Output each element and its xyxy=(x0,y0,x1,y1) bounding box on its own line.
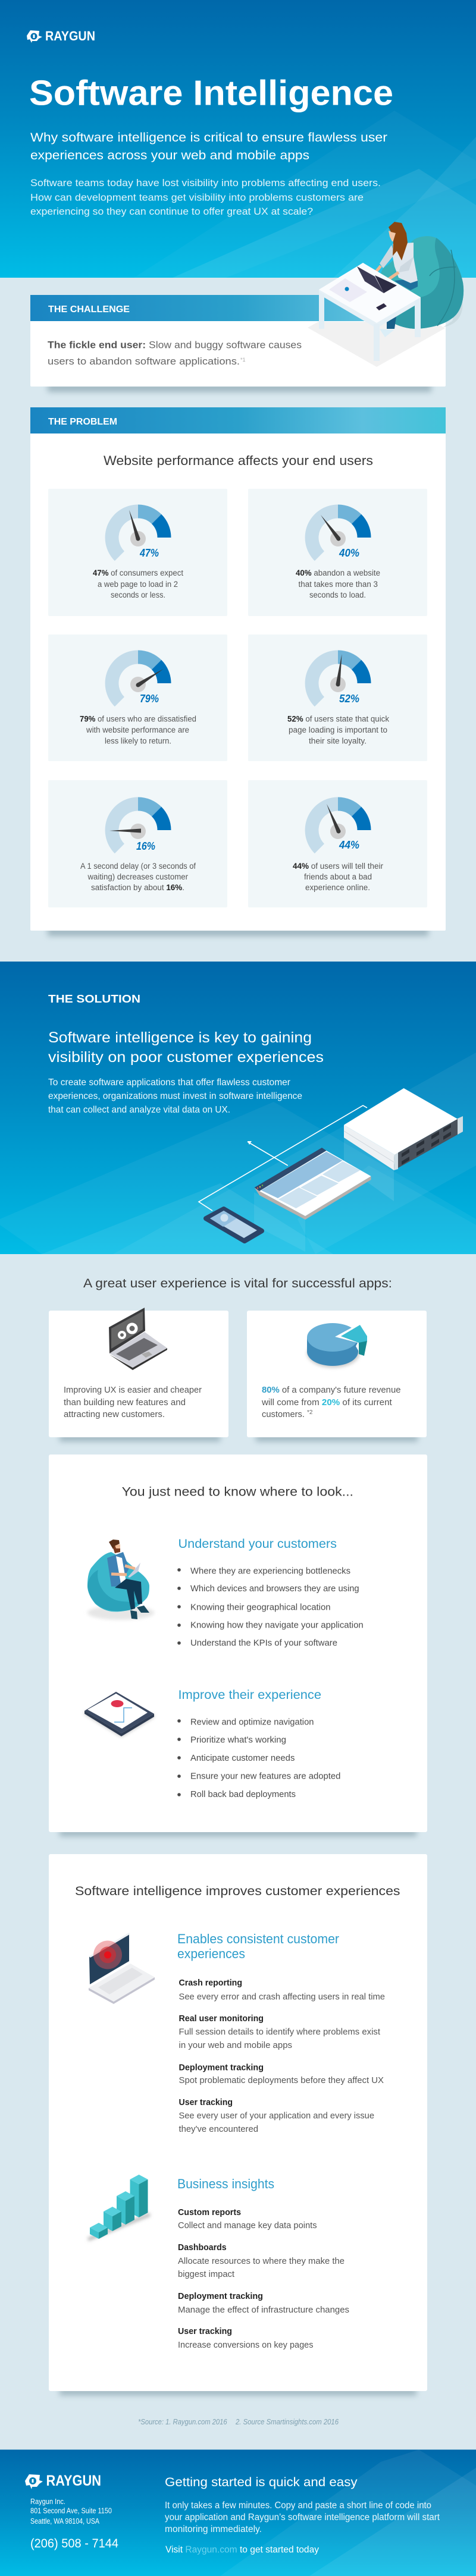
card: 16% xyxy=(48,780,227,907)
card: 52% xyxy=(248,634,427,761)
heading: You just need to know where to look... xyxy=(122,1484,353,1499)
card: 44%: 44% xyxy=(339,839,359,851)
list: understand: Knowing their geographical location xyxy=(190,1602,331,1613)
panel: improves customer experiences xyxy=(49,1854,427,2395)
card: improving UX xyxy=(49,1308,228,1441)
card: 79%: 79% xyxy=(140,693,159,705)
illustration: woman at desk on beanbag xyxy=(308,222,464,367)
challenge heading: THE CHALLENGE xyxy=(48,304,130,315)
card: 80/20 revenue: customers. xyxy=(262,1410,305,1419)
intro text: experiencing so they can continue to offer great UX at scale? xyxy=(30,206,313,217)
card: 52%: 52% of users state that quick xyxy=(287,715,389,723)
subtitle xyxy=(30,130,387,162)
feature list: enables: Crash reporting xyxy=(178,1978,242,1988)
intro text: How can development teams get visibility into problems customers are xyxy=(30,193,364,203)
challenge text xyxy=(48,339,302,367)
heading: great user experience: A great user experience is vital for successful apps: xyxy=(83,1276,392,1290)
card: 47%: seconds or less. xyxy=(111,590,165,599)
footer heading: Getting started is quick and easy xyxy=(165,2475,358,2489)
card: 47% xyxy=(48,489,227,616)
solution text xyxy=(48,1077,302,1115)
feature list: business insights: Deployment tracking xyxy=(178,2291,263,2301)
card: 47%: a web page to load in 2 xyxy=(98,580,178,589)
feature list: enables: they've encountered xyxy=(178,2124,258,2134)
heading: business insights: Business insights xyxy=(177,2176,274,2191)
icon: bar chart xyxy=(88,2175,150,2239)
heading: website performance: Website performance affects your end users xyxy=(104,453,373,468)
card: 40%: seconds to load. xyxy=(309,590,366,599)
icon: laptop with crash heatmap xyxy=(89,1933,155,2004)
call to action: Visit Raygun.com to get started today xyxy=(165,2545,319,2555)
list: understand: Knowing how they navigate your application xyxy=(190,1620,364,1631)
card: 79% xyxy=(48,634,227,761)
heading: understand your customers: Understand your customers xyxy=(178,1537,337,1551)
card: 16%: waiting) decreases customer xyxy=(87,872,188,881)
card: 40%: 40% xyxy=(339,547,359,559)
challenge text: The fickle end user: Slow and buggy software causes xyxy=(48,339,302,351)
phone number: (206) 508 - 7144 xyxy=(30,2537,118,2550)
connector lines xyxy=(199,1105,367,1211)
solution section background xyxy=(0,962,476,1254)
card: 44%: 44% of users will tell their xyxy=(293,862,383,871)
heading: enables consistent customer experiences: Enables consistent customer xyxy=(177,1931,339,1946)
feature list: business insights xyxy=(178,2207,349,2350)
address: Raygun Inc. xyxy=(30,2498,65,2506)
address xyxy=(30,2498,112,2525)
feature list: business insights: Collect and manage key data points xyxy=(178,2220,317,2231)
logo: Raygun header xyxy=(27,29,95,43)
address: 801 Second Ave, Suite 1150 xyxy=(30,2507,112,2515)
card: 47%: 47% of consumers expect xyxy=(93,568,183,577)
icon: tablet with heart xyxy=(84,1692,154,1737)
footer text: your application and Raygun’s software intelligence platform will start xyxy=(165,2512,440,2522)
footer text: monitoring immediately. xyxy=(165,2524,262,2534)
hero section xyxy=(0,0,476,278)
card: 44% xyxy=(248,780,427,907)
card: improving UX: attracting new customers. xyxy=(64,1410,165,1419)
subtitle: experiences across your web and mobile apps xyxy=(30,148,309,162)
feature list: enables: Full session details to identify where problems exist xyxy=(178,2027,381,2037)
card: 16%: A 1 second delay (or 3 seconds of xyxy=(80,862,196,871)
panel: the challenge xyxy=(30,295,446,392)
heading: enables consistent customer experiences: experiences xyxy=(177,1946,245,1961)
solution label: THE SOLUTION xyxy=(48,993,140,1005)
feature list: business insights: Manage the effect of infrastructure changes xyxy=(178,2305,349,2315)
card: 79%: less likely to return. xyxy=(105,736,171,746)
problem heading: THE PROBLEM xyxy=(48,417,117,427)
card: 40%: 40% abandon a website xyxy=(296,568,380,577)
list: understand: Which devices and browsers they are using xyxy=(190,1584,359,1594)
illustration: server, browser and phone xyxy=(199,1088,463,1252)
list: understand xyxy=(177,1566,364,1648)
feature list: business insights: Dashboards xyxy=(178,2242,227,2253)
feature list: enables: User tracking xyxy=(178,2097,233,2107)
feature list: business insights: User tracking xyxy=(178,2326,232,2336)
panel: where to look xyxy=(49,1455,427,1836)
challenge text: users to abandon software applications. xyxy=(48,356,240,367)
feature list: business insights: Allocate resources to where they make the xyxy=(178,2256,345,2266)
feature list: enables: Spot problematic deployments before they affect UX xyxy=(178,2075,384,2085)
card: 80/20 revenue: will come from 20% of its current xyxy=(261,1398,392,1408)
intro text: Software teams today have lost visibility into problems affecting end users. xyxy=(30,178,381,189)
feature list: business insights: Increase conversions on key pages xyxy=(178,2340,313,2350)
subtitle: Why software intelligence is critical to ensure flawless user xyxy=(30,130,387,144)
address: Seattle, WA 98104, USA xyxy=(30,2517,100,2525)
list: understand: Where they are experiencing bottlenecks xyxy=(190,1566,350,1576)
logo: Raygun footer: RAYGUN xyxy=(46,2473,101,2489)
sources xyxy=(138,2417,339,2426)
card: 52%: 52% xyxy=(339,693,359,705)
card: 80/20 revenue xyxy=(247,1311,427,1441)
card: 52%: their site loyalty. xyxy=(309,736,367,746)
solution heading: Software intelligence is key to gaining xyxy=(48,1029,312,1046)
heading: improve their experience: Improve their experience xyxy=(178,1688,321,1702)
solution heading: visibility on poor customer experiences xyxy=(48,1049,324,1066)
footer text: It only takes a few minutes. Copy and paste a short line of code into xyxy=(165,2500,431,2511)
intro text xyxy=(30,178,381,217)
logo: Raygun footer xyxy=(25,2473,101,2489)
feature list: enables: See every error and crash affecting users in real time xyxy=(178,1992,385,2002)
card: improving UX: than building new features and xyxy=(64,1398,186,1408)
feature list: business insights: biggest impact xyxy=(178,2269,235,2279)
card: 44%: experience online. xyxy=(305,883,370,892)
feature list: enables: Real user monitoring xyxy=(178,2013,264,2024)
sources: *Source: 1. Raygun.com 2016 xyxy=(138,2417,227,2426)
feature list: enables: See every user of your application and every issue xyxy=(178,2111,374,2121)
card: improving UX: Improving UX is easier and cheaper xyxy=(64,1386,202,1395)
card: 80/20 revenue: *2 xyxy=(307,1409,313,1416)
card: 16%: satisfaction by about 16%. xyxy=(91,883,184,892)
title: Software Intelligence xyxy=(29,74,393,113)
card: 47%: 47% xyxy=(139,547,159,559)
card: 52%: page loading is important to xyxy=(289,725,387,734)
icon: laptop with gears xyxy=(109,1308,167,1370)
heading: enables consistent customer experiences xyxy=(177,1931,339,1961)
solution text: that can collect and analyze vital data on UX. xyxy=(48,1105,230,1115)
feature list: enables: Deployment tracking xyxy=(178,2062,264,2073)
sources: 2. Source Smartinsights.com 2016 xyxy=(235,2417,339,2426)
list: improve: Prioritize what's working xyxy=(190,1735,286,1745)
solution text: experiences, organizations must invest in software intelligence xyxy=(48,1091,302,1101)
card: 40%: that takes more than 3 xyxy=(299,580,378,589)
list: understand: Understand the KPIs of your software xyxy=(190,1638,337,1648)
panel: the problem xyxy=(30,407,446,936)
footer background xyxy=(0,2450,476,2576)
feature list: enables: in your web and mobile apps xyxy=(178,2040,292,2050)
illustration: man on beanbag xyxy=(87,1540,154,1620)
list: improve: Roll back bad deployments xyxy=(190,1789,296,1799)
list: improve: Review and optimize navigation xyxy=(190,1717,314,1727)
list: improve: Anticipate customer needs xyxy=(190,1753,295,1763)
solution heading xyxy=(48,1029,324,1066)
card: 80/20 revenue: 80% of a company's future revenue xyxy=(262,1386,401,1395)
logo: Raygun header: RAYGUN xyxy=(45,29,95,43)
feature list: business insights: Custom reports xyxy=(178,2207,241,2217)
footer text xyxy=(165,2500,440,2534)
icon: pie chart xyxy=(307,1323,367,1368)
heading: Software intelligence improves customer experiences xyxy=(75,1884,400,1898)
solution text: To create software applications that offer flawless customer xyxy=(48,1077,291,1088)
card: 44%: friends about a bad xyxy=(304,872,372,881)
card: 79%: 79% of users who are dissatisfied xyxy=(80,715,196,723)
challenge text: *1 xyxy=(240,357,246,363)
card: 79%: with website performance are xyxy=(86,725,189,734)
feature list: enables xyxy=(178,1978,385,2134)
list: improve: Ensure your new features are adopted xyxy=(190,1771,340,1782)
list: improve xyxy=(177,1717,340,1799)
card: 40% xyxy=(248,489,427,616)
card: 16%: 16% xyxy=(136,840,155,852)
